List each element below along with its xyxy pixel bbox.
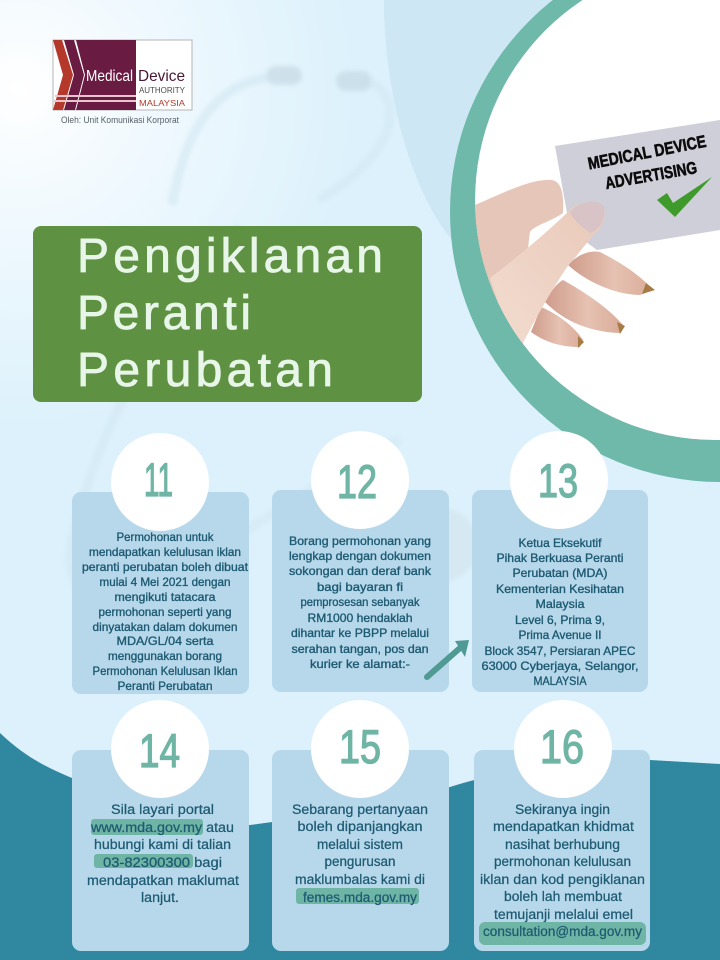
logo: MALAYSIA — [139, 98, 185, 108]
text: step 11: Permohonan untuk — [116, 530, 214, 544]
text: step 11: permohonan seperti yang — [98, 605, 232, 619]
text: step 12: Borang permohonan yang — [289, 534, 431, 548]
text: step 11: peranti perubatan boleh dibuat — [82, 560, 249, 574]
text: step 12: lengkap dengan dokumen — [289, 549, 431, 563]
text: step 16: iklan dan kod pengiklanan — [480, 872, 645, 887]
text: step 16: nasihat berhubung — [505, 837, 620, 852]
panel: step 16: 16 — [540, 720, 584, 773]
text: step 16: Sekiranya ingin — [515, 802, 610, 817]
text: step 15 — [292, 802, 428, 905]
logo: Device — [138, 68, 185, 85]
text: step 11: mulai 4 Mei 2021 dengan — [100, 575, 230, 589]
card text — [588, 134, 707, 190]
text: step 13: Pihak Berkuasa Peranti — [496, 551, 624, 565]
text: step 15: boleh dipanjangkan — [298, 819, 422, 834]
title — [77, 230, 383, 397]
bottom teal wave — [0, 733, 720, 960]
title: Perubatan — [77, 344, 333, 397]
index finger, palm and thumb — [470, 180, 563, 345]
text: step 13: Block 3547, Persiaran APEC — [484, 644, 636, 658]
teal ring — [450, 0, 720, 482]
text: step 11: MDA/GL/04 serta — [116, 634, 214, 648]
text: step 14: lanjut. — [141, 890, 179, 905]
text: step 15: Sebarang pertanyaan — [292, 802, 428, 817]
text: step 11: dinyatakan dalam dokumen — [92, 620, 238, 634]
text: step 16: consultation@mda.gov.my — [483, 924, 642, 939]
panel: step 11: 11 — [144, 453, 173, 506]
text: step 13: Level 6, Prima 9, — [515, 613, 605, 627]
text: step 14 — [87, 802, 239, 905]
text: step 15: pengurusan — [324, 854, 396, 869]
text: step 11: Peranti Perubatan — [118, 679, 212, 693]
text: step 16: temujanji melalui emel — [494, 907, 633, 922]
text: step 16: mendapatkan khidmat — [493, 819, 634, 834]
logo mark — [53, 40, 136, 110]
title: Peranti — [77, 287, 251, 340]
arrow — [427, 640, 469, 677]
text: step 13: Kementerian Kesihatan — [496, 582, 624, 596]
text: step 14: 03-82300300 bagi — [103, 855, 222, 870]
text: step 12: kurier ke alamat:- — [310, 657, 410, 671]
card text: ADVERTISING — [604, 158, 698, 193]
panel: step 12 — [272, 431, 449, 692]
text: step 11 — [82, 530, 249, 693]
background: faint stethoscope — [70, 66, 480, 598]
logo — [53, 40, 192, 110]
text: step 13: MALAYSIA — [534, 674, 586, 688]
highlight: femes link — [296, 888, 419, 904]
text: step 14: www.mda.gov.my atau — [90, 820, 234, 835]
text: step 12: bagi bayaran fi — [317, 580, 403, 594]
text: step 13 — [482, 536, 638, 688]
panel: step 14 — [72, 700, 249, 951]
text: step 12: RM1000 hendaklah — [308, 611, 412, 625]
text: step 12 — [289, 534, 432, 671]
text: step 14: Sila layari portal — [111, 802, 214, 817]
text: step 14: hubungi kami di talian — [94, 837, 231, 852]
logo: AUTHORITY — [139, 86, 186, 95]
panel: step 11 — [72, 433, 249, 694]
text: step 13: Perubatan (MDA) — [512, 566, 608, 580]
text: step 11: mendapatkan kelulusan iklan — [89, 545, 241, 559]
text: step 16: boleh lah membuat — [504, 889, 622, 904]
text: step 15: melalui sistem — [317, 837, 403, 852]
panel: step 14: 14 — [139, 724, 180, 777]
text: step 11: Permohonan Kelulusan Iklan — [92, 664, 238, 678]
highlight: website — [91, 819, 203, 835]
text: step 13: Ketua Eksekutif — [518, 536, 602, 550]
panel: step 15 — [272, 700, 449, 951]
text: step 16: permohonan kelulusan — [494, 854, 631, 869]
text: step 14: mendapatkan maklumat — [87, 873, 239, 888]
text: step 15: femes.mda.gov.my — [303, 890, 417, 905]
fingers — [531, 252, 653, 347]
title: Pengiklanan — [77, 230, 383, 283]
byline: Oleh: Unit Komunikasi Korporat — [61, 115, 179, 126]
text: step 12: pemprosesan sebanyak — [300, 595, 420, 609]
highlight: phone — [94, 854, 193, 868]
panel: step 13: 13 — [538, 454, 578, 507]
text: step 13: Malaysia — [536, 597, 585, 611]
sign card — [555, 120, 720, 250]
thumb nail — [570, 201, 605, 233]
panel: step 13 — [472, 431, 648, 692]
text: step 12: dihantar ke PBPP melalui — [291, 626, 429, 640]
text: step 12: sokongan dan deraf bank — [289, 564, 432, 578]
photo: hand holding card — [470, 0, 720, 440]
text: step 13: Prima Avenue II — [518, 628, 602, 642]
text: step 15: maklumbalas kami di — [295, 872, 425, 887]
panel: step 12: 12 — [337, 455, 377, 508]
text: step 11: menggunakan borang — [108, 649, 222, 663]
text: step 16 — [480, 802, 645, 939]
highlight: email — [479, 922, 646, 945]
nails — [578, 283, 655, 348]
text: step 11: mengikuti tatacara — [114, 590, 216, 604]
title panel — [33, 226, 422, 402]
panel: step 16 — [474, 700, 650, 951]
text: step 12: serahan tangan, pos dan — [292, 642, 428, 656]
icon: green check — [657, 177, 712, 217]
panel: step 15: 15 — [339, 720, 381, 773]
text: step 13: 63000 Cyberjaya, Selangor, — [482, 659, 638, 673]
logo text: Medical — [86, 68, 133, 85]
